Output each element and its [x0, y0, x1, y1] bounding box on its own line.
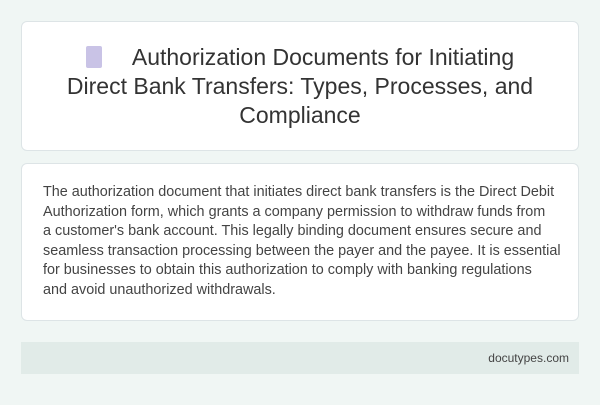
- description text: Authorization form, which grants a company permission to withdraw funds from: [43, 204, 545, 220]
- description text: and avoid unauthorized withdrawals.: [43, 282, 276, 298]
- title: Authorization Documents for Initiating Direct Bank Transfers: Types, Processes, and Compliance: [67, 44, 533, 128]
- icon: document: [86, 46, 102, 68]
- description text: seamless transaction processing between the payer and the payee. It is essential: [43, 243, 561, 259]
- description text: for businesses to obtain this authorization to comply with banking regulations: [43, 262, 532, 278]
- footer: [21, 342, 579, 374]
- title card: [21, 21, 579, 151]
- footer: docutypes.com: [488, 351, 569, 365]
- description text: a customer's bank account. This legally binding document ensures secure and: [43, 223, 541, 239]
- description text: [43, 184, 561, 298]
- description text: The authorization document that initiates direct bank transfers is the Direct Debit: [43, 184, 554, 200]
- description panel: [21, 163, 579, 321]
